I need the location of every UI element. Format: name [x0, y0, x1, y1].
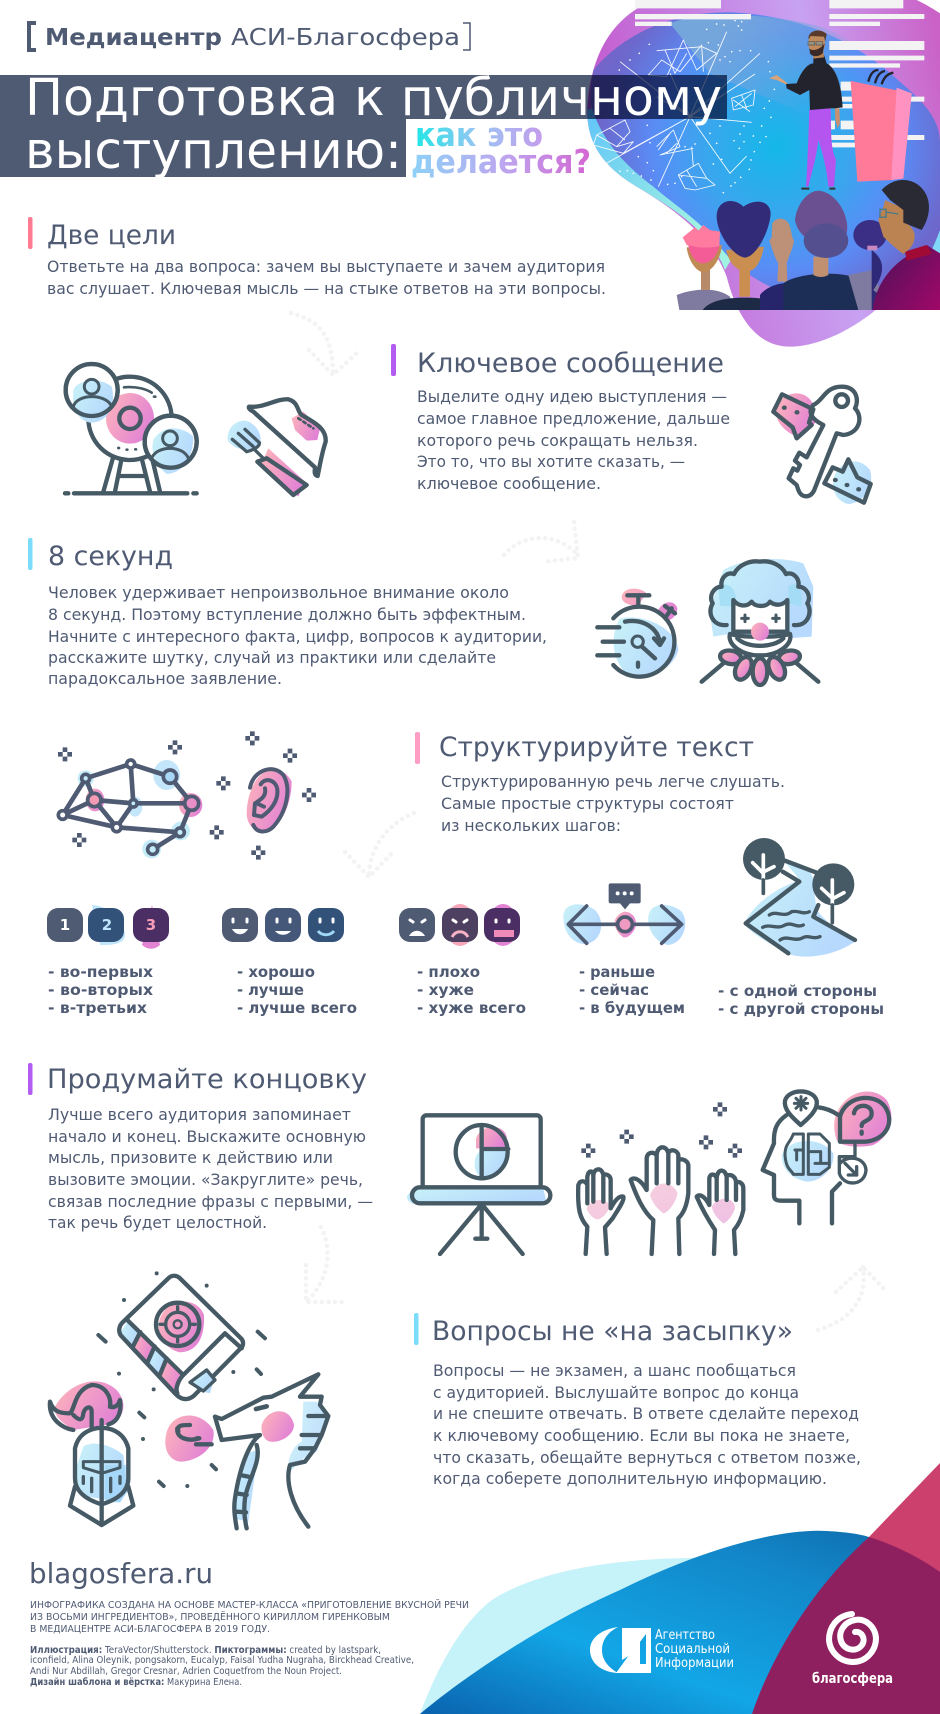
section: Продумайте концовку	[28, 1063, 373, 1232]
icon: constellation	[58, 731, 316, 860]
heading: Две цели	[47, 220, 176, 251]
icon: numbered tiles 1 2 3: 3	[146, 916, 156, 934]
logo: Агентство Социальной Информации: Социальной	[655, 1642, 730, 1657]
icon: knight helmet	[50, 1381, 133, 1525]
body	[48, 1105, 373, 1232]
icon: sad faces	[399, 904, 520, 946]
sparkles	[58, 731, 316, 860]
header: Медиацентр АСИ-Благосфера: АСИ-Благосфера	[231, 25, 460, 51]
body	[433, 1361, 861, 1488]
logo: благосфера	[812, 1614, 893, 1687]
main title: выступлению:	[25, 122, 402, 181]
blue wave	[420, 1531, 940, 1714]
icon: book	[98, 1273, 265, 1486]
main title: Подготовка к публичному	[25, 69, 722, 128]
header: Медиацентр АСИ-Благосфера: Медиацентр	[45, 25, 222, 51]
body: когда соберете дополнительную информацию.	[433, 1469, 827, 1488]
heading: Вопросы не «на засыпку»	[432, 1316, 793, 1347]
icon: river with trees	[743, 838, 855, 957]
body	[417, 387, 730, 493]
credits: Andi Nur Abdillah, Gregor Cresnar, Adrien Coquetfrom the Noun Project.	[30, 1666, 342, 1677]
icon: ear	[247, 769, 292, 832]
title bars	[0, 75, 727, 177]
body: связав последние фразы с первыми, —	[48, 1192, 373, 1211]
heading: Продумайте концовку	[47, 1064, 367, 1095]
list: плохо: - плохо	[417, 963, 480, 981]
light cyan wave	[420, 1558, 760, 1714]
list: хорошо: - лучше всего	[237, 999, 357, 1017]
plum shape	[752, 1537, 940, 1714]
list: хорошо: - лучше	[237, 981, 304, 999]
list: с одной стороны	[718, 982, 884, 1018]
body	[441, 772, 785, 835]
icon: stopwatch	[597, 589, 678, 677]
accent bar	[28, 1063, 32, 1095]
body: вызовите эмоции. «Закруглите» речь,	[48, 1170, 363, 1189]
body: что сказать, обещайте вернуться с ответом позже,	[433, 1448, 861, 1467]
body: Лучше всего аудитория запоминает	[48, 1105, 351, 1124]
heading: 8 секунд	[48, 541, 173, 572]
list: хорошо	[237, 963, 357, 1017]
inner blue blob	[591, 12, 940, 310]
section: Структурируйте текст	[415, 732, 785, 835]
credits: Дизайн шаблона и вёрстка: Макурина Елена.	[30, 1677, 242, 1688]
list: плохо: - хуже	[417, 981, 474, 999]
logo: Агентство Социальной Информации: Информации	[655, 1656, 734, 1671]
body	[47, 257, 606, 298]
icon: happy faces	[222, 908, 344, 942]
credits note: ИЗ ВОСЬМИ ИНГРЕДИЕНТОВ», ПРОВЕДЁННОГО КИРИЛЛОМ ГИРЕНКОВЫМ	[30, 1610, 390, 1623]
list: плохо	[417, 963, 526, 1017]
icon: presentation board	[407, 1115, 550, 1254]
dotted arrow 3	[345, 813, 414, 877]
list: раньше: - сейчас	[579, 981, 649, 999]
list: во-первых: - во-первых	[48, 963, 153, 981]
subtitle: как это делается?: делается?	[411, 142, 591, 181]
list: раньше	[579, 963, 685, 1017]
list: раньше: - раньше	[579, 963, 655, 981]
body: вас слушает. Ключевая мысль — на стыке ответов на эти вопросы.	[47, 279, 606, 298]
list: с одной стороны: - с одной стороны	[718, 982, 877, 1000]
speaker	[769, 30, 843, 189]
network constellation	[593, 32, 760, 190]
body: и не спешите отвечать. В ответе сделайте переход	[433, 1404, 859, 1423]
crimson triangle	[869, 1463, 940, 1572]
body: расскажите шутку, случай из практики или сделайте	[48, 648, 496, 667]
body: Человек удерживает непроизвольное внимание около	[48, 583, 509, 602]
icon: numbered tiles 1 2 3	[47, 905, 169, 949]
list: с одной стороны: - с другой стороны	[718, 1000, 884, 1018]
credits note	[30, 1598, 469, 1635]
credits: Иллюстрация: TeraVector/Shutterstock. Пиктограммы: created by lastspark,	[30, 1645, 381, 1656]
network dots	[619, 21, 774, 193]
logo: благосфера: благосфера	[812, 1671, 893, 1687]
accent bar	[28, 217, 32, 249]
link: blagosfera.ru: blagosfera.ru	[29, 1557, 213, 1590]
icon: numbered tiles 1 2 3: 1	[60, 916, 70, 934]
body: ключевое сообщение.	[417, 474, 601, 493]
logo: Агентство Социальной Информации	[590, 1627, 734, 1673]
body: начало и конец. Выскажите основную	[48, 1127, 366, 1146]
section: Вопросы не «на засыпку»	[414, 1313, 861, 1488]
header: Медиацентр АСИ-Благосфера	[29, 23, 470, 51]
body: Ответьте на два вопроса: зачем вы выступаете и зачем аудитория	[47, 257, 605, 276]
icon: numbered tiles 1 2 3: 2	[102, 916, 112, 934]
body: Это то, что вы хотите сказать, —	[417, 452, 685, 471]
icon: dragon breathing	[165, 1374, 328, 1528]
list: плохо: - хуже всего	[417, 999, 526, 1017]
icon: head with question	[763, 1091, 891, 1223]
body: Начните с интересного факта, цифр, вопросов к аудитории,	[48, 627, 547, 646]
person: bald	[760, 218, 794, 310]
credits: iconfield, Alina Oleynik, pongsakorn, Eucalyp, Faisal Yudha Nugraha, Birckhead Creative,	[30, 1655, 414, 1666]
body: Структурированную речь легче слушать.	[441, 772, 785, 791]
list: раньше: - в будущем	[579, 999, 685, 1017]
icon: clown	[702, 559, 818, 685]
body: которого речь сокращать нельзя.	[417, 431, 698, 450]
accent bar	[28, 538, 32, 570]
logo: Агентство Социальной Информации: Агентство	[655, 1628, 715, 1643]
section: Ключевое сообщение	[391, 344, 730, 493]
body	[48, 583, 547, 688]
list: во-первых: - в-третьих	[48, 999, 147, 1017]
person: navy hair	[702, 201, 771, 310]
heading: Структурируйте текст	[439, 732, 754, 763]
body: так речь будет целостной.	[48, 1213, 267, 1232]
main title	[25, 69, 722, 181]
icon: time arrow	[563, 883, 685, 945]
dotted arrow 4	[306, 1227, 342, 1302]
list: хорошо: - хорошо	[237, 963, 315, 981]
icon: wheel with people	[65, 364, 197, 493]
floating marks	[98, 1273, 265, 1486]
body: Вопросы — не экзамен, а шанс пообщаться	[433, 1361, 796, 1380]
body: 8 секунд. Поэтому вступление должно быть эффектным.	[48, 605, 526, 624]
accent bar	[415, 732, 420, 764]
body: парадоксальное заявление.	[48, 669, 282, 688]
body: Выделите одну идею выступления —	[417, 387, 727, 406]
subtitle: как это делается?	[411, 115, 591, 181]
body: Самые простые структуры состоят	[441, 794, 734, 813]
dotted arrow 1	[291, 313, 360, 375]
outer purple blob	[587, 0, 940, 347]
body: к ключевому сообщению. Если вы пока не знаете,	[433, 1426, 850, 1445]
dotted arrow 2	[504, 522, 578, 562]
person: man with glasses	[873, 180, 940, 310]
person: grey shoulders with pink hair	[677, 225, 733, 310]
body: самое главное предложение, дальше	[417, 409, 730, 428]
footer wave shapes	[420, 1463, 940, 1714]
podium	[851, 70, 912, 182]
list: во-первых: - во-вторых	[48, 981, 153, 999]
body: мысль, призовите к действию или	[48, 1148, 333, 1167]
section: 8 секунд	[28, 538, 547, 688]
body: из нескольких шагов:	[441, 816, 621, 835]
cyan tail of blob	[587, 93, 787, 270]
credits	[30, 1645, 414, 1688]
icon: key with speech bubbles	[773, 387, 871, 504]
right cyan sliver	[873, 230, 940, 310]
white slide strips	[635, 0, 924, 147]
top lighter wash	[670, 15, 907, 113]
section: Две цели	[28, 217, 606, 298]
icon: raised hands	[578, 1102, 743, 1254]
credits note: В МЕДИАЦЕНТРЕ АСИ-БЛАГОСФЕРА В 2019 ГОДУ.	[30, 1624, 270, 1635]
audience	[677, 180, 940, 310]
person: small girl	[848, 220, 886, 310]
icon: bow and arrow	[228, 399, 326, 497]
accent bar	[414, 1313, 418, 1345]
accent bar	[391, 344, 396, 376]
dotted arrow 5	[818, 1267, 887, 1330]
body: с аудиторией. Выслушайте вопрос до конца	[433, 1383, 799, 1402]
heading: Ключевое сообщение	[417, 348, 724, 379]
credits note: ИНФОГРАФИКА СОЗДАНА НА ОСНОВЕ МАСТЕР-КЛАССА «ПРИГОТОВЛЕНИЕ ВКУСНОЙ РЕЧИ	[30, 1598, 469, 1611]
hero illustration: speaker and audience	[587, 0, 940, 347]
list: во-первых	[48, 963, 153, 1017]
person: purple hair	[783, 191, 858, 310]
subtitle: как это делается?: как это	[415, 115, 543, 154]
